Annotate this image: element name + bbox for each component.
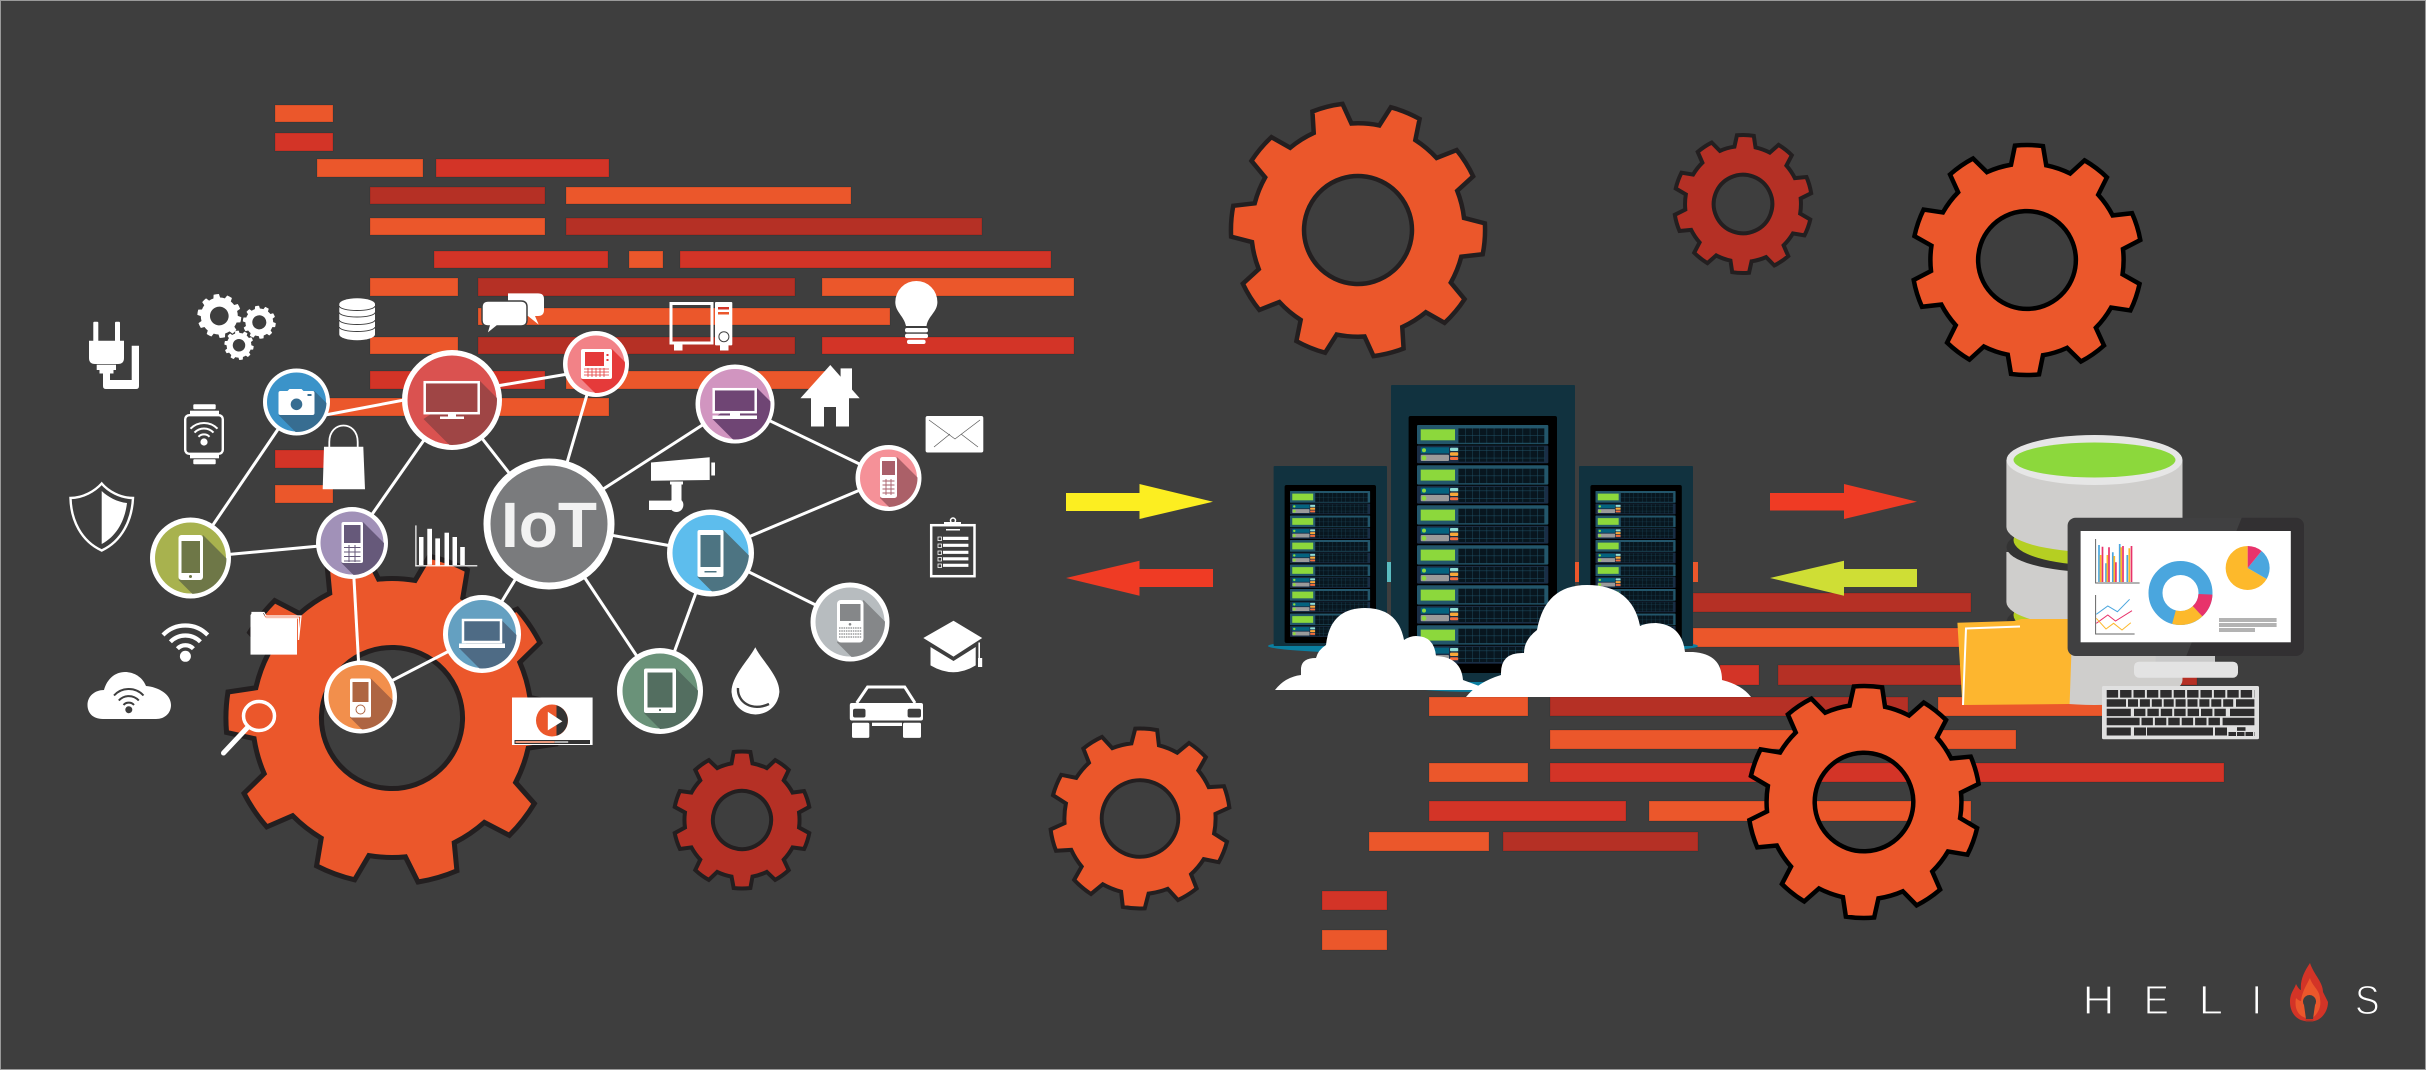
data bars: lower right stream [1322, 593, 2224, 950]
node: IoT hub [487, 462, 611, 586]
icon: clipboard [931, 518, 974, 576]
node: slider phone [563, 331, 629, 397]
icon: shield [70, 484, 133, 550]
icon: house [800, 365, 860, 426]
icon: power plug [89, 322, 139, 389]
node: purple keypad phone [316, 507, 388, 579]
data bars: upper left stream [275, 105, 1074, 503]
gear: small dark top [1655, 117, 1831, 291]
node: purple monitor [696, 364, 774, 444]
node: monitor [402, 350, 502, 450]
logo wordmark: I [2251, 977, 2262, 1023]
gear: top right [1881, 116, 2173, 404]
logo wordmark: H [2082, 977, 2114, 1024]
gear: lower middle [1023, 703, 1257, 934]
logo wordmark: E [2144, 978, 2169, 1023]
node: camera [263, 368, 330, 436]
network connection lines [190, 364, 888, 697]
server tower: right [1579, 466, 1693, 646]
dashboard legend lines [2219, 618, 2277, 632]
dashboard line chart [2096, 595, 2135, 634]
gear: small dark lower left [656, 735, 828, 905]
database cylinder [2006, 435, 2182, 705]
server tower: left [1274, 466, 1387, 646]
arrow: yellow-green pointing left [1770, 561, 1917, 596]
icon: water drop [732, 647, 779, 714]
node: pink flip phone [856, 445, 922, 511]
icon: wifi cloud [88, 672, 171, 719]
icon: bar chart [415, 525, 477, 566]
gear: lower right over data bars [1716, 655, 2012, 949]
node: blue smartphone [667, 510, 754, 596]
logo wordmark: S [2355, 978, 2380, 1023]
yellow folder [1957, 619, 2073, 705]
arrow: red pointing left [1066, 561, 1213, 596]
icon: database stack [339, 298, 375, 340]
dashboard bar chart [2096, 539, 2140, 583]
node: blue laptop [443, 595, 521, 673]
icon: wifi signal [163, 625, 208, 662]
gear: large left gear behind IoT network [220, 549, 564, 887]
logo wordmark: L [2199, 977, 2223, 1023]
icon: video player [512, 698, 593, 745]
dashboard pie chart [2226, 546, 2270, 590]
icon: computer unit [671, 302, 732, 350]
server racks with clouds [1268, 385, 1751, 697]
icon: shopping bag [323, 426, 365, 489]
gear: top centre [1223, 97, 1493, 363]
node: green smartphone [150, 518, 231, 598]
icon: three gears [194, 291, 278, 362]
icon: smart watch [185, 404, 223, 464]
node: grey keyboard phone [810, 582, 890, 662]
icon: security camera [649, 457, 715, 512]
icon: graduation cap [923, 621, 982, 672]
icon: car [850, 687, 923, 738]
cloud: right [1466, 585, 1751, 697]
server tower: centre [1391, 385, 1575, 682]
icon: chat bubbles [482, 293, 544, 334]
arrow: yellow pointing right [1066, 484, 1213, 519]
icon: magnifier [224, 702, 274, 753]
node: green tablet [617, 648, 703, 734]
keyboard [2102, 686, 2259, 739]
icon: envelope [926, 416, 983, 452]
cloud: left [1275, 608, 1490, 690]
icon: light bulb [895, 281, 937, 344]
arrow: red pointing right [1770, 484, 1917, 519]
logo: Helios [2082, 963, 2380, 1024]
dashboard donut chart [2145, 558, 2216, 628]
node: orange music player [324, 660, 397, 734]
logo wordmark [2082, 977, 2380, 1024]
icon: folder [250, 612, 301, 655]
logo flame [2290, 963, 2328, 1022]
desktop monitor with dashboard [2068, 518, 2304, 678]
IoT label: IoT [501, 489, 597, 561]
